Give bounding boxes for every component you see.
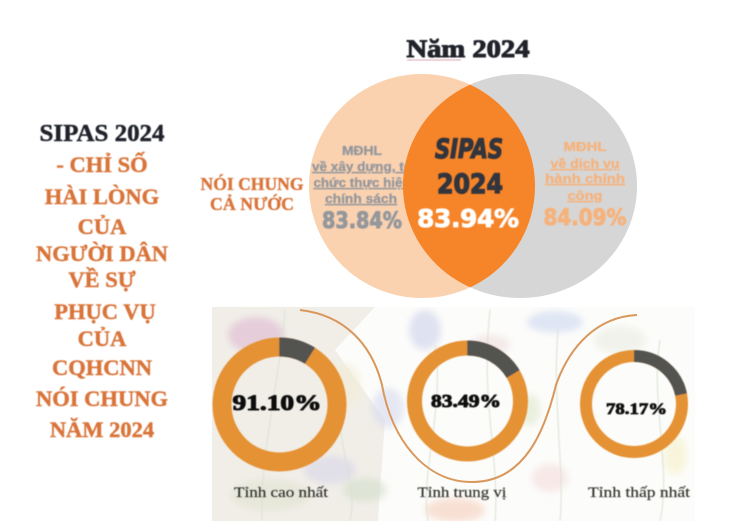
text: policy satisfaction: MĐHL (342, 144, 382, 158)
subtitle text block: NĂM 2024 (50, 417, 154, 442)
label: nói chung cả nước (200, 174, 304, 214)
venn circle: left (309, 74, 535, 298)
text: SIPAS 2024 centre (417, 134, 519, 233)
label: nói chung cả nước: NÓI CHUNG (200, 174, 304, 194)
donut: highest province 91.10% (222, 347, 337, 462)
text: SIPAS 2024 centre: SIPAS (435, 134, 503, 165)
chart: venn diagram (309, 74, 637, 298)
subtitle text block: VỀ SỰ (68, 266, 136, 292)
donut: median province 83.49% (414, 348, 520, 454)
text: public service satisfaction: MĐHL (564, 140, 607, 154)
subtitle text block: PHỤC VỤ (54, 299, 156, 324)
venn intersection (403, 84, 535, 288)
panel: left title (36, 121, 168, 442)
heading: Năm 2024: Năm 2024 (406, 36, 530, 63)
subtitle text block: CỦA (78, 214, 127, 239)
venn circle: right (403, 74, 637, 298)
labels: province captions: Tỉnh trung vị (418, 485, 506, 501)
subtitle text block: NÓI CHUNG (36, 385, 168, 411)
text: policy satisfaction: về xây dựng, tổ (312, 160, 412, 174)
heading: SIPAS 2024: SIPAS 2024 (40, 121, 164, 147)
text: public service satisfaction: về dịch vụ (550, 157, 620, 171)
subtitle text block: - CHỈ SỐ (56, 151, 148, 177)
subtitle text block: CQHCNN (52, 355, 152, 380)
text: public service satisfaction (544, 140, 626, 231)
subtitle text block (36, 151, 168, 442)
labels: province captions: Tỉnh thấp nhất (588, 485, 691, 501)
subtitle text block: NGƯỜI DÂN (36, 240, 168, 266)
subtitle text block: HÀI LÒNG (45, 183, 159, 209)
panel: floral background (212, 307, 695, 522)
donut: lowest province 78.17% (586, 356, 682, 452)
label: nói chung cả nước: CẢ NƯỚC (210, 194, 294, 214)
labels: province captions (234, 485, 691, 501)
text: public service satisfaction: công (568, 189, 602, 203)
donut: lowest province 78.17%: 78.17% (606, 401, 667, 418)
text: policy satisfaction (312, 144, 412, 234)
labels: province captions: Tỉnh cao nhất (234, 485, 329, 501)
text: SIPAS 2024 centre: 83.94% (417, 204, 519, 233)
text: public service satisfaction: 84.09% (544, 206, 626, 231)
donut: median province 83.49%: 83.49% (431, 391, 501, 411)
subtitle text block: CỦA (78, 326, 127, 351)
text: policy satisfaction: chức thực hiện (314, 176, 410, 190)
curve line (300, 310, 637, 482)
text: policy satisfaction: 83.84% (322, 209, 402, 234)
donut: highest province 91.10%: 91.10% (232, 390, 322, 415)
text: SIPAS 2024 centre: 2024 (437, 169, 503, 200)
text: public service satisfaction: hành chính (545, 172, 625, 186)
text: policy satisfaction: chính sách (325, 192, 397, 206)
